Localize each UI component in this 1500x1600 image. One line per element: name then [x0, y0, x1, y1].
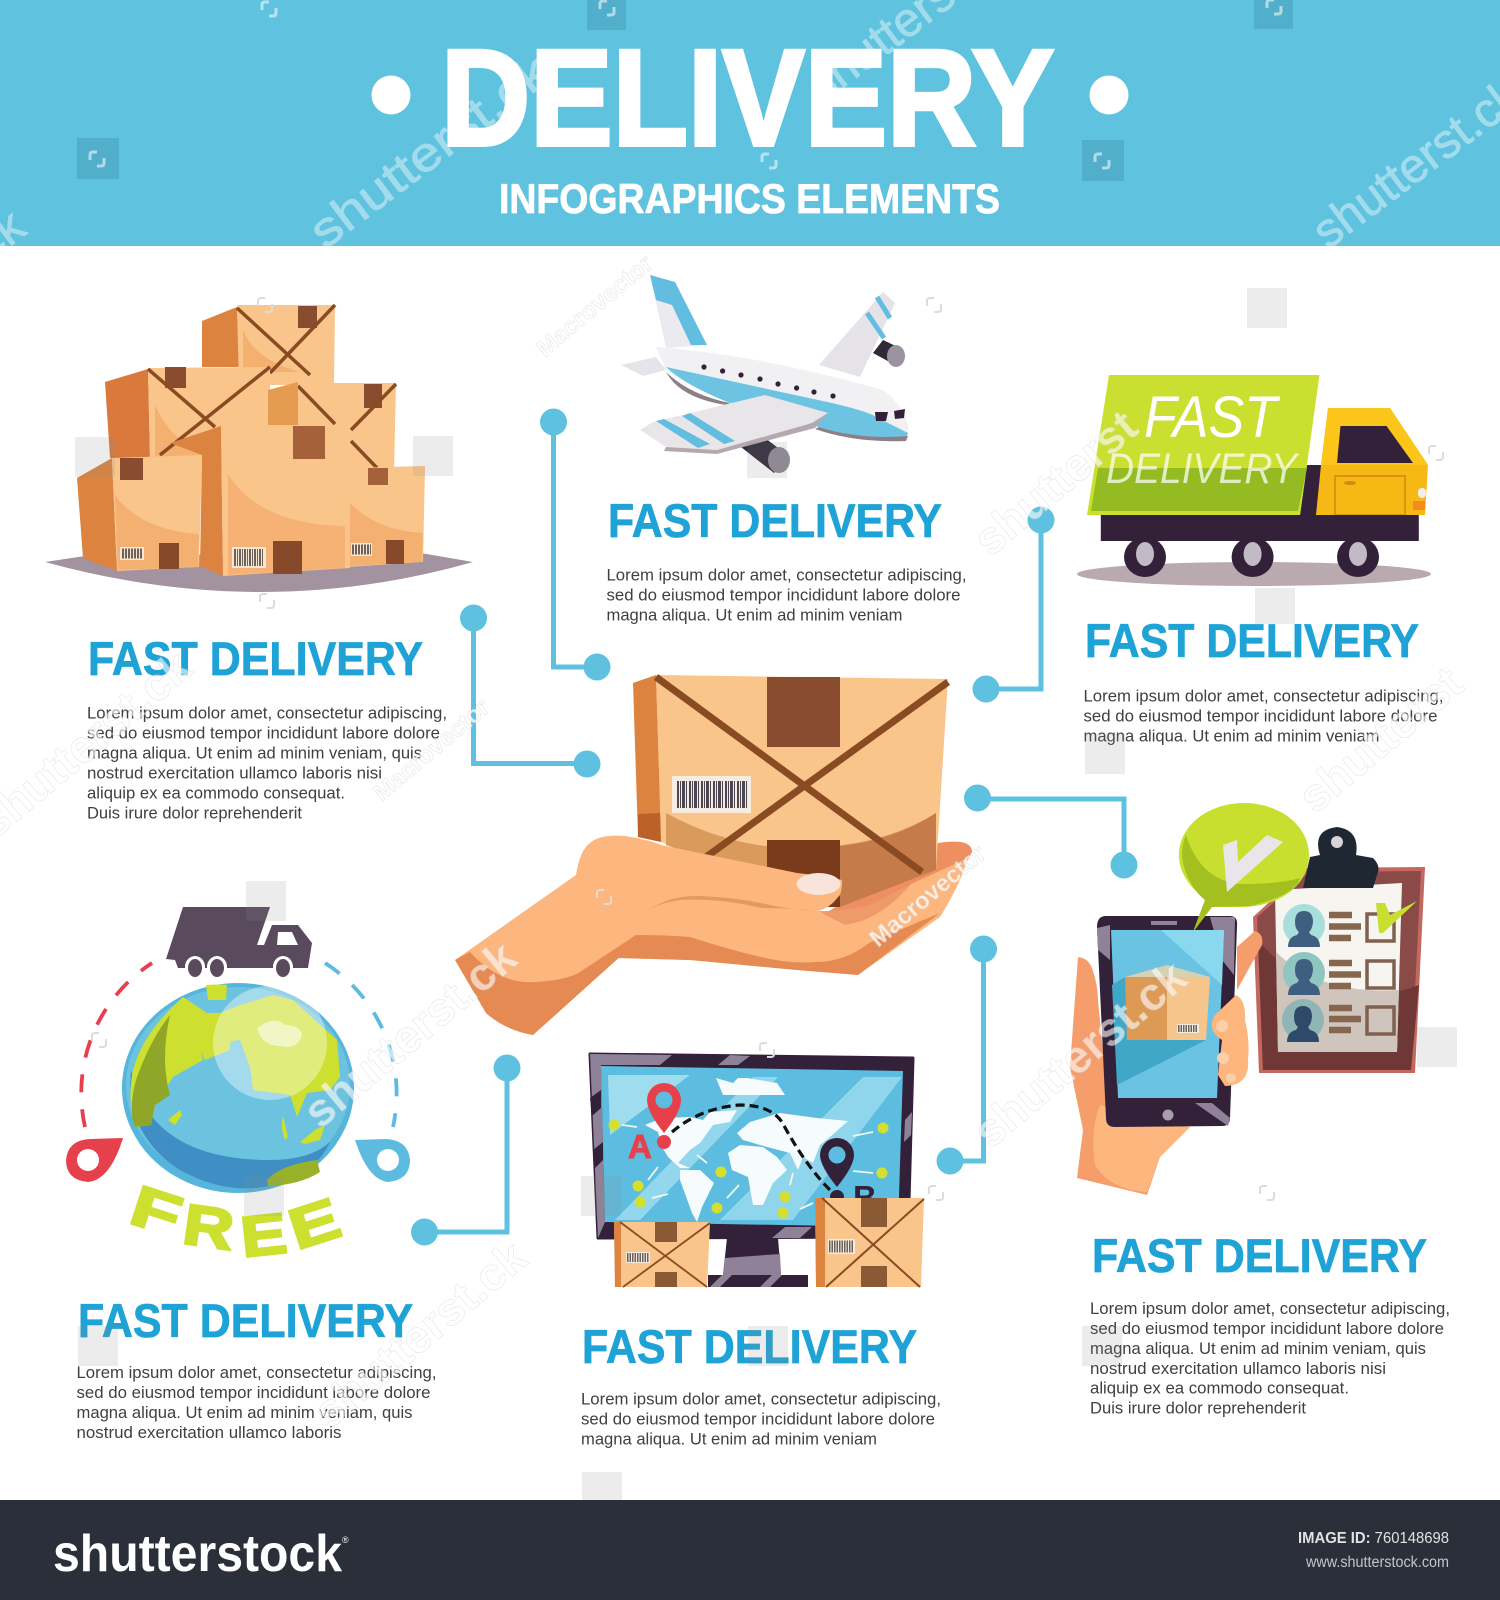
text block: sed do eiusmod tempor incididunt labore dolore: [1084, 708, 1438, 726]
icon: phone and clipboard: [1070, 803, 1425, 1195]
connector: monitor to centre: [936, 936, 997, 1174]
watermark overlay: shutterst.ck: [963, 950, 1196, 1158]
truck lettering: [1106, 385, 1300, 493]
panel: monitor text: [581, 1321, 941, 1448]
text block: Lorem ipsum dolor amet, consectetur adipiscing,: [87, 704, 447, 722]
curved FREE lettering: F: [123, 1173, 189, 1249]
stand: [708, 1238, 808, 1287]
small truck: [166, 907, 312, 978]
text block: [1090, 1300, 1450, 1418]
connector: truck to centre: [972, 506, 1054, 702]
blue route: [325, 963, 397, 1127]
end pin hole: [377, 1149, 399, 1171]
text block: nostrud exercitation ullamco laboris nisi: [87, 764, 382, 782]
heading: FAST DELIVERY: [582, 1321, 917, 1374]
text block: magna aliqua. Ut enim ad minim veniam, quis: [1090, 1340, 1426, 1358]
text block: Lorem ipsum dolor amet, consectetur adipiscing,: [606, 566, 966, 584]
text block: magna aliqua. Ut enim ad minim veniam, quis: [76, 1404, 412, 1422]
text block: Duis irure dolor reprehenderit: [87, 804, 302, 822]
heading: FAST DELIVERY: [1092, 1230, 1427, 1283]
panel: globe text: [76, 1295, 436, 1442]
text block: sed do eiusmod tempor incididunt labore dolore: [606, 586, 960, 604]
text block: [581, 1390, 941, 1448]
watermark overlay: shutterst.ck: [300, 44, 560, 259]
text block: magna aliqua. Ut enim ad minim veniam: [581, 1430, 877, 1448]
end pin: [355, 1139, 410, 1182]
text block: [76, 1364, 436, 1442]
heading: FAST DELIVERY: [608, 495, 942, 548]
connector: airplane to centre: [540, 408, 610, 680]
truck lettering: FAST: [1144, 385, 1280, 450]
panel: pile of boxes text: [87, 633, 447, 822]
truck lettering: DELIVERY: [1106, 445, 1300, 493]
start pin hole: [77, 1149, 99, 1171]
text block: aliquip ex ea commodo consequat.: [1090, 1380, 1349, 1398]
icon: fast delivery truck: [1077, 375, 1431, 586]
watermark overlay: Macrovector: [532, 250, 658, 363]
text block: [87, 704, 447, 822]
fingers: [1212, 931, 1262, 1086]
text block: magna aliqua. Ut enim ad minim veniam, quis: [87, 744, 422, 762]
text block: magna aliqua. Ut enim ad minim veniam: [1084, 728, 1380, 746]
watermark overlay: Macrovector: [865, 840, 991, 953]
image id: IMAGE ID: 760148698: [1298, 1530, 1449, 1547]
icon: globe with free delivery: [66, 907, 410, 1270]
text block: magna aliqua. Ut enim ad minim veniam: [606, 606, 902, 624]
panel: airplane text: [606, 495, 966, 624]
curved FREE lettering: R: [179, 1192, 238, 1262]
watermark overlay: shutterst: [963, 399, 1147, 566]
header banner: [0, 0, 1500, 246]
text block: sed do eiusmod tempor incididunt labore dolore: [87, 724, 440, 742]
subtitle: INFOGRAPHICS ELEMENTS: [499, 175, 1000, 222]
pin A: [628, 1083, 681, 1165]
text block: Lorem ipsum dolor amet, consectetur adipiscing,: [581, 1390, 941, 1408]
footer bar: [0, 1500, 1500, 1600]
text block: [1084, 688, 1444, 746]
curved FREE lettering: [123, 1173, 348, 1270]
text block: [606, 566, 966, 624]
text block: nostrud exercitation ullamco laboris nisi: [1090, 1360, 1386, 1378]
heading: FAST DELIVERY: [1085, 615, 1419, 668]
footer logo: shutterstock: [53, 1525, 342, 1583]
watermark overlay: shutterst.ck: [293, 930, 526, 1138]
pin B: [820, 1138, 877, 1216]
text block: sed do eiusmod tempor incididunt labore dolore: [1090, 1320, 1444, 1338]
monitor frame: [590, 1054, 913, 1238]
pin A: A: [628, 1128, 652, 1165]
icon: pile of boxes: [45, 305, 473, 592]
icon: airplane: [621, 275, 908, 473]
start pin: [66, 1138, 123, 1182]
right parcel: [815, 1198, 924, 1287]
watermark overlay: Macrovector: [369, 694, 495, 807]
title: DELIVERY: [441, 22, 1054, 175]
phone hand: [1070, 957, 1190, 1195]
icon: monitor with map: [590, 1054, 924, 1287]
text block: Lorem ipsum dolor amet, consectetur adipiscing,: [76, 1364, 436, 1382]
clipboard: [1253, 827, 1425, 1073]
connector: globe to centre: [411, 1054, 520, 1246]
icon: hand holding parcel: [455, 675, 972, 1035]
footer logo: ®: [342, 1535, 349, 1545]
text block: Lorem ipsum dolor amet, consectetur adipiscing,: [1084, 688, 1444, 706]
globe sphere: [122, 983, 354, 1193]
panel: truck text: [1084, 615, 1444, 746]
dashed routes: [81, 963, 152, 1127]
heading: FAST DELIVERY: [78, 1295, 413, 1348]
pin B: B: [853, 1179, 877, 1216]
panel: phone text: [1090, 1230, 1450, 1418]
website: www.shutterstock.com: [1305, 1554, 1449, 1571]
text block: sed do eiusmod tempor incididunt labore dolore: [581, 1410, 935, 1428]
watermark overlay: shutterst.ck: [303, 1230, 536, 1438]
text block: Lorem ipsum dolor amet, consectetur adipiscing,: [1090, 1300, 1450, 1318]
watermark overlay: shutterst: [1288, 656, 1472, 823]
text block: aliquip ex ea commodo consequat.: [87, 784, 345, 802]
text block: Duis irure dolor reprehenderit: [1090, 1400, 1306, 1418]
heading: FAST DELIVERY: [88, 633, 423, 686]
left parcel: [614, 1222, 710, 1287]
curved FREE lettering: E: [238, 1202, 290, 1270]
text block: sed do eiusmod tempor incididunt labore dolore: [76, 1384, 430, 1402]
map screen: [601, 1066, 903, 1227]
speech bubble with check: [1179, 803, 1309, 932]
phone body: [1097, 916, 1237, 1127]
connector: boxes to centre: [460, 604, 600, 778]
curved FREE lettering: E: [281, 1186, 348, 1262]
text block: nostrud exercitation ullamco laboris: [76, 1424, 342, 1442]
connector: phone to centre: [964, 784, 1138, 878]
